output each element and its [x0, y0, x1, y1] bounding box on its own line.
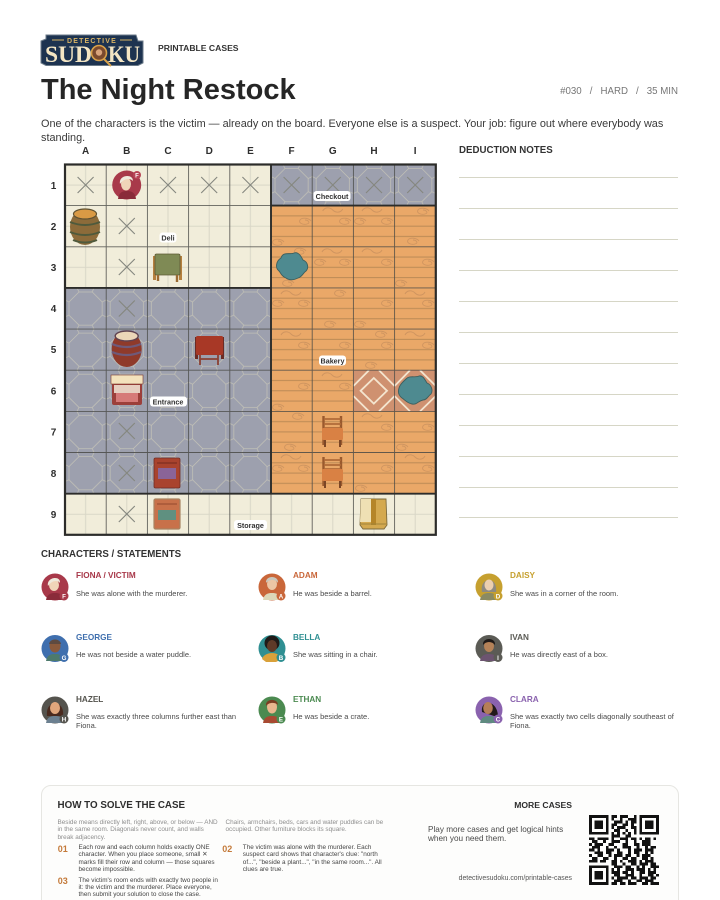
- portrait: Ethan: E: [279, 716, 283, 723]
- portrait: Fiona: F: [62, 593, 66, 600]
- rule note left: in the same room. Diagonals never count, and walls: [58, 826, 204, 833]
- more cases link: detectivesudoku.com/printable-cases: [459, 875, 572, 882]
- portrait: Daisy: D: [496, 593, 501, 600]
- portrait: Clara: [476, 696, 502, 724]
- card: Daisy: She was in a corner of the room.: [510, 589, 618, 598]
- portrait: Adam: A: [279, 593, 284, 600]
- card: Ivan: He was directly east of a box.: [510, 650, 608, 659]
- card: Ethan: [293, 694, 369, 721]
- rule note left: break adjacency.: [58, 834, 105, 841]
- column labels: D: [206, 146, 213, 157]
- card: Clara: CLARA: [510, 694, 539, 704]
- water puddle I6: [398, 376, 432, 404]
- token: Fiona victim: F: [135, 174, 139, 180]
- step 03 text: [78, 876, 218, 898]
- portrait: Daisy: [476, 574, 502, 600]
- row labels: [51, 181, 57, 521]
- portrait: George: G: [62, 655, 67, 662]
- table D5: [195, 336, 224, 365]
- room walls: [65, 164, 436, 535]
- chair G7: [322, 416, 343, 447]
- column labels: G: [329, 146, 337, 157]
- QR code: [589, 815, 659, 885]
- portrait: Ivan: [476, 635, 502, 662]
- box H9: [360, 499, 387, 529]
- case meta: #030 / HARD / 35 MIN: [560, 86, 678, 97]
- card: Clara: [510, 694, 674, 730]
- portrait: Bella: [258, 635, 286, 662]
- logo: SUD: [45, 42, 92, 67]
- column labels: A: [82, 146, 89, 157]
- chair C3: [153, 254, 182, 282]
- panel: how to solve and more cases: [41, 785, 679, 900]
- portrait: Bella: B: [279, 655, 284, 662]
- portrait: Hazel: [42, 696, 68, 724]
- row labels: 8: [51, 469, 57, 480]
- card: George: GEORGE: [76, 632, 112, 642]
- game board: [50, 146, 678, 536]
- room label: Deli: [160, 232, 176, 242]
- rule note right: Chairs, armchairs, beds, cars and water puddles can be: [226, 819, 383, 826]
- room label: Deli: Deli: [161, 233, 175, 242]
- card: Ivan: [510, 632, 608, 659]
- rule note left: Beside means directly left, right, above, or below — AND: [58, 819, 218, 826]
- room label: Bakery: Bakery: [321, 356, 344, 365]
- step 02 text: of...", "beside a plant...", "in the same room...". All: [243, 859, 382, 866]
- deduction notes heading: DEDUCTION NOTES: [459, 145, 553, 156]
- step 03 text: it: the victim and the murderer. Place everyone,: [78, 884, 212, 891]
- chair G8: [322, 457, 343, 488]
- rule note right: [226, 819, 383, 833]
- card: Ethan: He was beside a crate.: [293, 712, 369, 721]
- step 01 text: Each row and each column holds exactly ONE: [78, 844, 210, 851]
- card: Fiona: FIONA / VICTIM: [76, 570, 136, 580]
- rule note left: [58, 819, 218, 841]
- card: Ivan: IVAN: [510, 632, 529, 642]
- column labels: I: [414, 146, 417, 157]
- row labels: 7: [51, 428, 57, 438]
- row labels: 2: [51, 222, 57, 233]
- heading: how to solve: HOW TO SOLVE THE CASE: [58, 800, 185, 811]
- column labels: C: [164, 146, 172, 157]
- portrait: Ivan: I: [497, 655, 499, 662]
- card: Fiona: She was alone with the murderer.: [76, 589, 187, 598]
- step 01 text: marks fill their row and column — those squares: [78, 859, 215, 866]
- row labels: 4: [51, 304, 57, 315]
- portrait: Ethan: [258, 696, 286, 724]
- title: The Night Restock: [41, 74, 296, 106]
- column labels: F: [289, 146, 295, 157]
- heading: more cases: MORE CASES: [514, 800, 572, 810]
- crate C9: [154, 499, 180, 529]
- card: Bella: She was sitting in a chair.: [293, 650, 378, 659]
- room label: Storage: Storage: [237, 521, 264, 530]
- rug tiles: [353, 370, 436, 411]
- display counter B6: [111, 375, 143, 405]
- row labels: 3: [51, 263, 57, 274]
- room: deli: [65, 164, 271, 288]
- characters heading: CHARACTERS / STATEMENTS: [41, 549, 181, 560]
- room: bakery: [271, 206, 436, 494]
- step 02 text: suspect card shows that character's clue: "north: [243, 851, 378, 858]
- column labels: B: [123, 146, 130, 157]
- barrel A2: [70, 209, 100, 245]
- step 01 text: become impossible.: [78, 866, 135, 873]
- logo: KU: [108, 42, 140, 67]
- card: Fiona: [76, 570, 187, 598]
- card: Bella: [293, 632, 378, 659]
- card: George: He was not beside a water puddle.: [76, 650, 191, 659]
- card: Daisy: DAISY: [510, 570, 535, 580]
- step 02 text: clues are true.: [243, 866, 283, 873]
- portrait: Hazel: H: [62, 716, 67, 723]
- step 01 number: 01: [58, 844, 68, 854]
- card: Hazel: She was exactly three columns further east than Fiona.: [76, 712, 236, 730]
- grid lines: [65, 164, 436, 535]
- card: Hazel: [76, 694, 236, 730]
- card: Ethan: ETHAN: [293, 694, 321, 704]
- intro text: One of the characters is the victim — already on the board. Everyone else is a suspect. Your job: figure out where everybody was standing.: [41, 118, 663, 144]
- crate C8: [154, 458, 180, 488]
- column labels: [82, 146, 417, 157]
- logo: DETECTIVE: [67, 38, 117, 45]
- card: Bella: BELLA: [293, 632, 320, 642]
- step 03 text: then submit your solution to close the case.: [78, 891, 201, 898]
- room: checkout: [271, 164, 436, 206]
- card: Hazel: HAZEL: [76, 694, 103, 704]
- portrait: Adam: [258, 574, 286, 600]
- row labels: 1: [51, 181, 57, 192]
- deduction notes lines: [459, 178, 678, 518]
- token: Fiona victim: [112, 170, 141, 200]
- printable cases label: PRINTABLE CASES: [158, 43, 239, 53]
- room: storage: [65, 494, 436, 535]
- step 03 number: 03: [58, 876, 68, 886]
- row labels: 5: [51, 345, 57, 356]
- step 01 text: [78, 844, 215, 873]
- step 02 text: [242, 844, 382, 873]
- room label: Entrance: Entrance: [153, 397, 183, 406]
- portrait: Clara: C: [496, 716, 501, 723]
- logo: [40, 34, 144, 67]
- row labels: 9: [51, 510, 57, 521]
- card: Adam: He was beside a barrel.: [293, 589, 372, 598]
- room: entrance: [65, 288, 271, 494]
- portrait: George: [42, 635, 68, 662]
- step 02 text: The victim was alone with the murderer. Each: [243, 844, 371, 851]
- card: George: [76, 632, 191, 659]
- portrait: Fiona: [42, 574, 68, 600]
- rule note right: occupied. Other furniture blocks its square.: [226, 826, 347, 833]
- card: Adam: [293, 570, 372, 598]
- row labels: 6: [51, 386, 57, 398]
- card: Clara: She was exactly two cells diagonally southeast of Fiona.: [510, 712, 674, 730]
- step 03 text: The victim's room ends with exactly two people in: [78, 876, 218, 884]
- more cases text: Play more cases and get logical hints when you need them.: [428, 824, 563, 843]
- impossible cell marks: [78, 177, 423, 522]
- water puddle F3: [277, 253, 308, 280]
- step 01 text: character. When you place someone, small ✕: [78, 851, 208, 858]
- column labels: H: [370, 146, 378, 157]
- column labels: E: [247, 146, 254, 157]
- barrel B5: [112, 331, 142, 367]
- card: Adam: ADAM: [293, 570, 318, 580]
- step 02 number: 02: [222, 844, 232, 854]
- room label: Checkout: Checkout: [316, 192, 349, 201]
- card: Daisy: [510, 570, 618, 598]
